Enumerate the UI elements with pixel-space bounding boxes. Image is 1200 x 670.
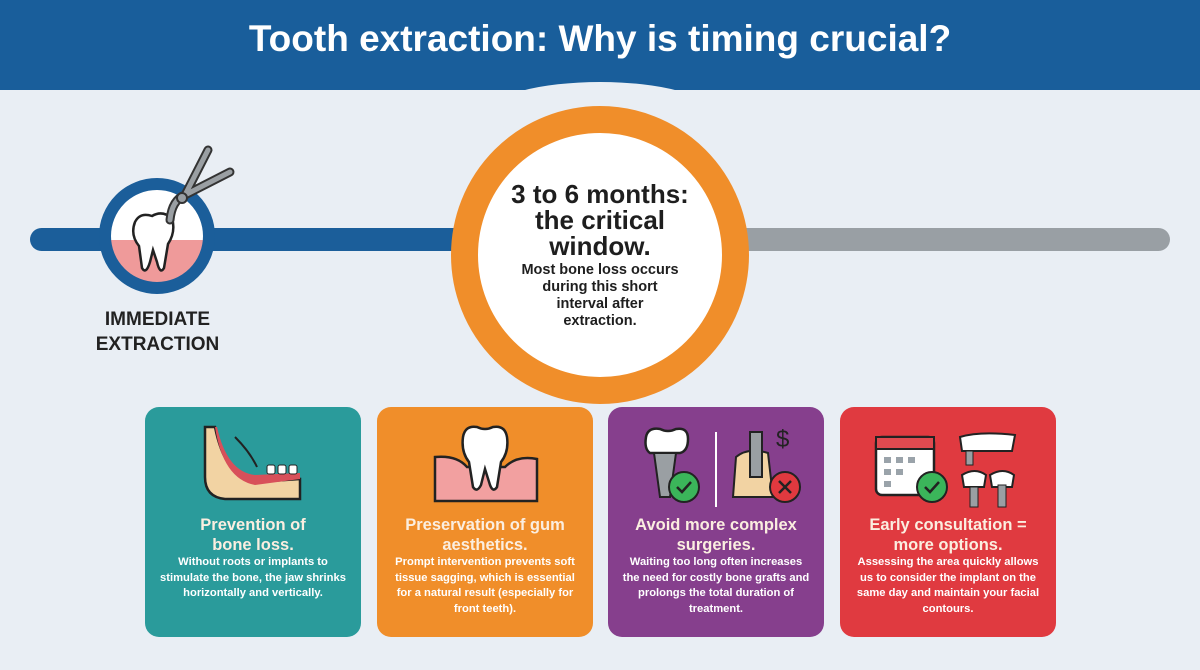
card: gum aesthetics bbox=[377, 407, 593, 637]
card: complex surgeries: Waiting too long often increases the need for costly bone grafts and prolongs the total duration of treatment. bbox=[623, 556, 809, 614]
central circle bbox=[451, 106, 749, 404]
header arc bump bbox=[490, 82, 710, 142]
card: bone loss: Prevention of bbox=[200, 516, 306, 534]
circle heading bbox=[511, 179, 689, 261]
label: immediate extraction: IMMEDIATE bbox=[105, 309, 210, 330]
card: bone loss bbox=[145, 407, 361, 637]
card: early consultation: Assessing the area quickly allows us to consider the implant on the same day and maintain your facial contours. bbox=[857, 556, 1039, 614]
card: bone loss: bone loss. bbox=[212, 536, 294, 554]
timeline bar: gray bbox=[730, 228, 1170, 251]
circle heading: the critical bbox=[535, 205, 665, 235]
card: gum aesthetics: Preservation of gum bbox=[405, 516, 565, 534]
card: bone loss: Without roots or implants to stimulate the bone, the jaw shrinks horizontally and vertically. bbox=[160, 556, 346, 599]
timeline bar: blue bbox=[30, 228, 470, 251]
card: early consultation bbox=[840, 407, 1056, 637]
circle text: interval after bbox=[556, 296, 644, 312]
card: gum aesthetics: Prompt intervention prevents soft tissue sagging, which is essential for a natural result (especially for front teeth). bbox=[395, 556, 575, 614]
card: early consultation: Early consultation = bbox=[869, 516, 1027, 534]
title: Tooth extraction: Why is timing crucial? bbox=[249, 18, 951, 59]
icon: calendar and implants bbox=[874, 432, 1016, 508]
label: immediate extraction: EXTRACTION bbox=[96, 334, 219, 355]
icon: tooth in gum bbox=[434, 426, 538, 502]
icon: implant vs graft bbox=[644, 426, 801, 507]
label: immediate extraction bbox=[96, 309, 219, 355]
header band bbox=[0, 0, 1200, 90]
icon: extraction bbox=[100, 146, 234, 294]
circle text: extraction. bbox=[563, 313, 637, 329]
card: gum aesthetics: aesthetics. bbox=[442, 536, 528, 554]
circle text bbox=[521, 262, 679, 329]
circle heading: 3 to 6 months: bbox=[511, 179, 689, 209]
circle heading: window. bbox=[549, 231, 651, 261]
card: complex surgeries: surgeries. bbox=[677, 536, 755, 554]
card: early consultation: more options. bbox=[893, 536, 1003, 554]
card: complex surgeries: Avoid more complex bbox=[635, 516, 797, 534]
circle text: during this short bbox=[542, 279, 658, 295]
icon: jaw bone bbox=[204, 426, 302, 500]
icon: implant vs graft: $ bbox=[776, 426, 789, 453]
card: complex surgeries bbox=[608, 407, 824, 637]
circle text: Most bone loss occurs bbox=[521, 262, 679, 278]
